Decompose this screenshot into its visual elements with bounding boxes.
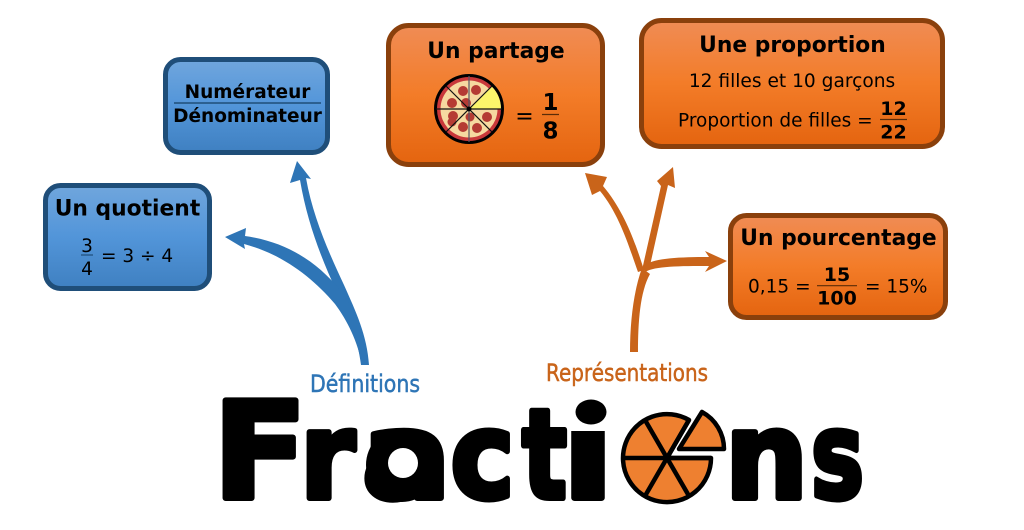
branch to Une proportion [642, 167, 675, 270]
fraction one eighth: = [515, 104, 534, 130]
panel: Une proportion [642, 20, 942, 146]
arrow: Représentations branches [585, 167, 727, 352]
dot of letter i [570, 394, 612, 431]
panel: Un quotient [46, 186, 210, 288]
trunk [630, 268, 650, 352]
title: Fractions: a [362, 388, 451, 527]
quotient formula: = 3 ÷ 4 [101, 246, 173, 267]
letter a bowl and counter [366, 428, 438, 502]
fraction one eighth: 8 [542, 118, 559, 144]
title: Fractions: c [450, 388, 514, 527]
label: Définitions: Définitions [310, 370, 420, 398]
fraction one eighth [515, 90, 559, 144]
quotient formula: 4 [81, 259, 93, 280]
title: Fractions: s [811, 388, 864, 527]
branch to Un partage [585, 173, 644, 272]
title: Fractions: i [562, 377, 614, 529]
pourcentage formula [748, 264, 928, 310]
proportion formula: Proportion de filles = [678, 110, 873, 132]
icon: orange pie replacing the letter o [623, 412, 724, 502]
proportion heading: Une proportion [699, 33, 886, 58]
proportion formula: 12 [880, 98, 907, 120]
proportion formula [678, 98, 907, 144]
pourcentage formula: = 15% [865, 276, 928, 298]
title: Fractions: t [522, 384, 567, 528]
panel: Un partage [388, 26, 602, 164]
pourcentage formula: 15 [824, 264, 850, 286]
title: Fractions [213, 374, 864, 530]
arrow: Définitions to Un quotient [225, 228, 368, 365]
quotient formula [81, 236, 173, 280]
proportion formula: 22 [880, 122, 907, 144]
title: Fractions: r [300, 388, 355, 527]
title: Fractions: n [725, 388, 808, 527]
quotient formula: 3 [81, 236, 93, 257]
pourcentage formula: 0,15 = [748, 276, 811, 298]
title: Fractions: F [213, 374, 307, 530]
label: Représentations: Représentations [546, 359, 708, 387]
icon: pizza [436, 76, 502, 142]
numerator label: Numérateur [185, 82, 311, 103]
panel: Numérateur / Dénominateur [166, 60, 328, 152]
proportion example: 12 filles et 10 garçons [689, 71, 895, 92]
branch to Un pourcentage [645, 251, 727, 272]
pourcentage formula: 100 [817, 288, 857, 310]
denominator label: Dénominateur [173, 106, 323, 127]
arrow: Définitions to Numérateur [290, 161, 369, 365]
fraction one eighth: 1 [542, 90, 559, 116]
quotient heading: Un quotient [55, 196, 200, 222]
pourcentage heading: Un pourcentage [740, 226, 937, 251]
panel: Un pourcentage [730, 216, 946, 318]
partage heading: Un partage [427, 39, 565, 64]
